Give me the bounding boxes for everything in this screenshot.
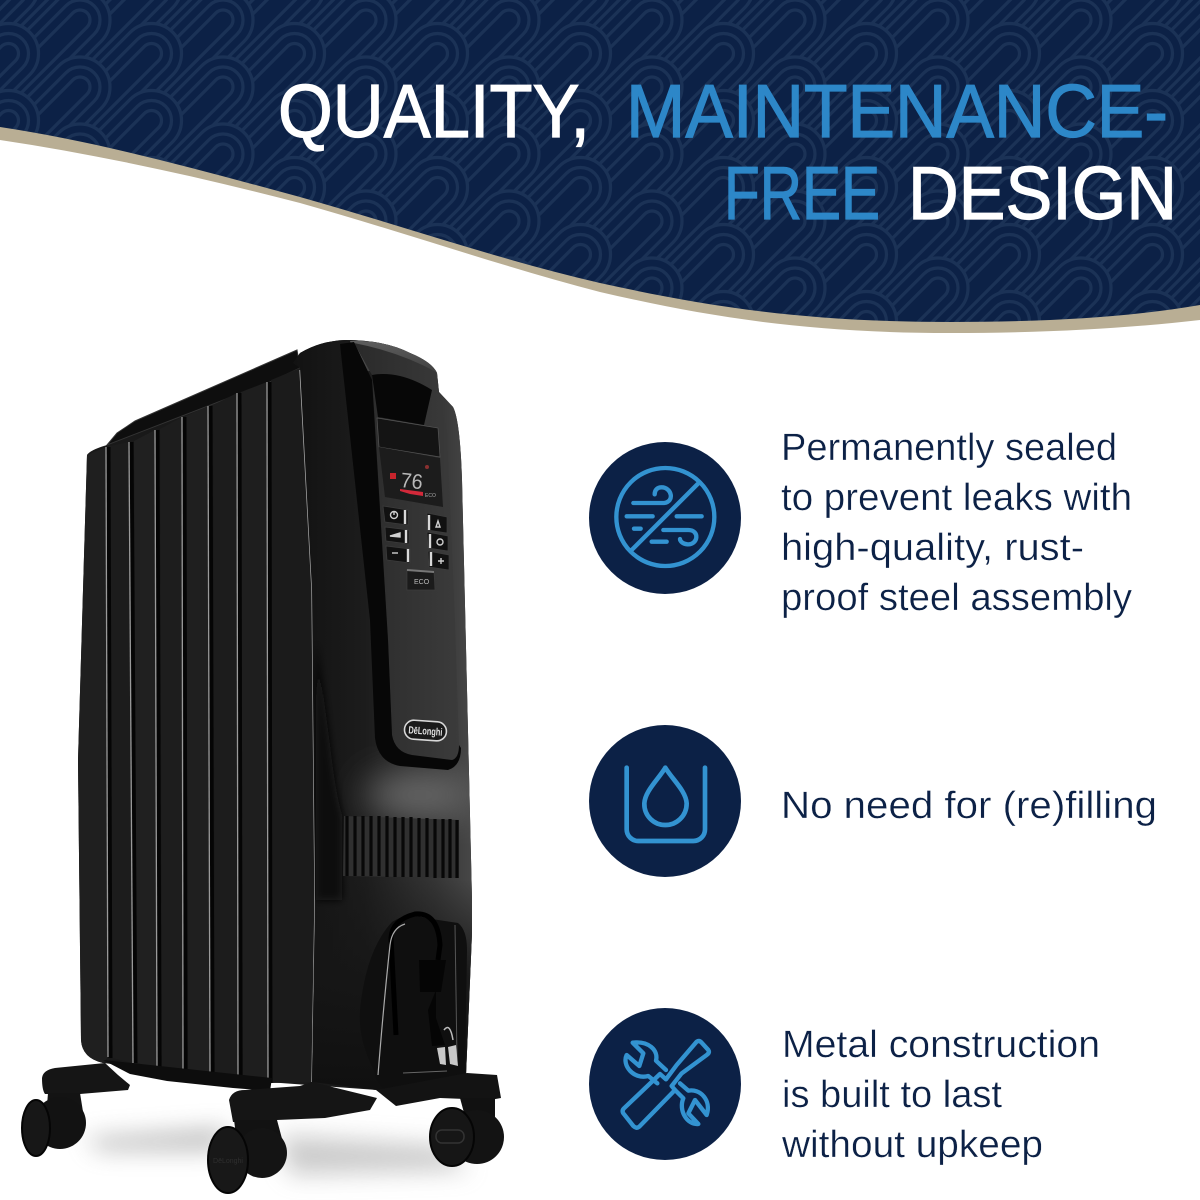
feature 1 text — [781, 427, 1132, 619]
feature 3 icon: wrench and screwdriver — [589, 1008, 741, 1160]
caster: left — [22, 1063, 130, 1156]
top rail — [107, 350, 300, 445]
title: QUALITY, — [278, 69, 590, 153]
end cap — [293, 340, 472, 1090]
caster: right — [376, 1073, 504, 1166]
black stripe around panel — [340, 342, 461, 770]
caster: front middle: DēLonghi — [213, 1158, 243, 1165]
handle recess — [372, 374, 432, 425]
radiator fins — [78, 368, 315, 1083]
title: FREE — [724, 151, 880, 235]
brand badge — [404, 720, 447, 741]
product: oil-free radiator heater — [22, 340, 504, 1193]
title: DESIGN — [908, 151, 1177, 235]
display: ECO — [425, 493, 436, 499]
title — [278, 69, 1177, 235]
feature 1 icon: sealed, no leaks — [589, 442, 741, 594]
display: 76 — [399, 469, 424, 494]
feature 3 text: without upkeep — [781, 1124, 1043, 1166]
feature 3 text — [781, 1024, 1100, 1166]
floor shadow — [85, 1128, 470, 1175]
caster: front middle — [208, 1082, 377, 1193]
cord storage — [360, 914, 467, 1092]
control buttons: ECO — [414, 579, 430, 586]
end cap lighting — [312, 640, 475, 1090]
vent slots — [343, 816, 459, 878]
vent dots — [375, 363, 428, 378]
feature 2 icon: water drop in tank — [589, 725, 741, 877]
heater base body — [78, 340, 472, 1090]
control buttons — [383, 506, 449, 590]
feature 2 text: No need for (re)filling — [781, 785, 1157, 827]
feature 1 text: proof steel assembly — [781, 577, 1132, 619]
header wave banner — [0, 0, 1200, 333]
control panel — [354, 343, 459, 760]
base rail — [103, 1060, 272, 1091]
upper display panel — [377, 418, 440, 457]
feature 3 text: is built to last — [782, 1074, 1002, 1116]
display — [379, 447, 443, 507]
feature 1 text: Permanently sealed — [781, 427, 1117, 469]
top cap — [350, 341, 437, 390]
feature 1 text: to prevent leaks with — [781, 477, 1132, 519]
brand badge: DēLonghi — [408, 724, 443, 739]
title: MAINTENANCE- — [626, 69, 1168, 153]
feature 1 text: high-quality, rust- — [781, 527, 1084, 569]
feature 3 text: Metal construction — [782, 1024, 1100, 1066]
